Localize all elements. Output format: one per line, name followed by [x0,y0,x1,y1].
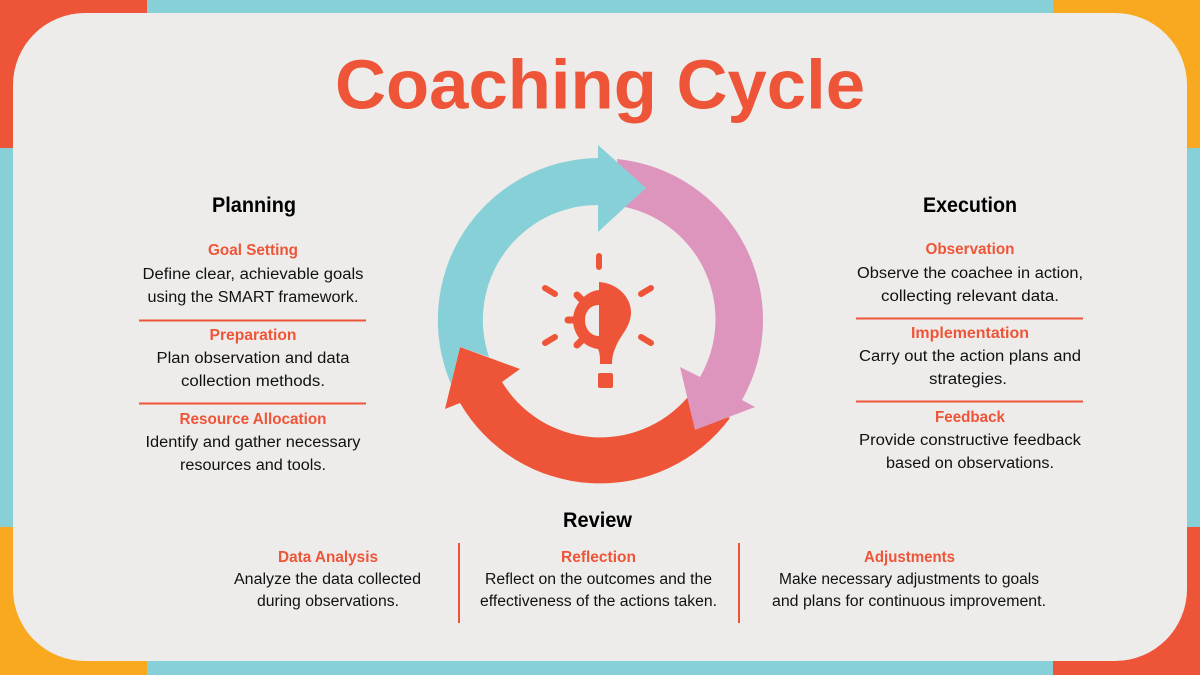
text block: goal setting: Define clear, achievable goals [142,266,364,283]
text block: resource allocation: Resource Allocation [180,411,326,428]
text block: implementation: Carry out the action plans and [859,348,1081,365]
text block: implementation [859,325,1081,388]
text block: adjustments: Adjustments [864,549,955,566]
heading: execution: Execution [923,194,1017,217]
text block: adjustments: Make necessary adjustments to goals [779,571,1039,588]
heading: review: Review [563,509,633,532]
text block: reflection: Reflect on the outcomes and the [485,571,712,588]
text block: data analysis: Data Analysis [278,549,378,566]
text block: implementation: strategies. [929,371,1007,388]
text block: reflection: Reflection [561,549,636,566]
text block: observation: collecting relevant data. [881,288,1059,305]
text block: resource allocation [146,411,361,474]
panel: review [234,509,1046,623]
text block: observation: Observation [926,241,1014,258]
text block: goal setting [142,242,364,306]
text block: preparation [156,327,350,390]
text block: reflection [480,549,717,610]
text block: observation [857,241,1083,305]
text block: adjustments: and plans for continuous improvement. [772,593,1046,610]
arrow: planning (teal) [438,145,646,384]
text block: preparation: collection methods. [181,373,325,390]
text block: resource allocation: resources and tools. [180,457,326,474]
icon: light bulb with gear [545,256,651,388]
text block: adjustments [772,549,1046,610]
text block: data analysis: Analyze the data collected [234,571,421,588]
text block: observation: Observe the coachee in action, [857,265,1083,282]
panel: planning [139,194,366,474]
text block: feedback: Feedback [935,409,1005,426]
heading: planning: Planning [212,194,296,217]
text block: implementation: Implementation [911,325,1029,342]
text block: preparation: Plan observation and data [156,350,350,367]
arrow: review (red) [445,347,730,483]
text block: reflection: effectiveness of the actions taken. [480,593,717,610]
text block: preparation: Preparation [210,327,296,344]
arrow: execution (pink) [617,159,763,430]
panel: execution [856,194,1083,472]
text block: goal setting: using the SMART framework. [148,289,358,306]
title: Coaching Cycle [335,46,865,124]
text block: feedback: Provide constructive feedback [859,432,1081,449]
text block: feedback [859,409,1081,472]
text block: feedback: based on observations. [886,455,1054,472]
text block: data analysis [234,549,421,610]
cycle diagram [438,145,763,483]
text block: resource allocation: Identify and gather necessary [146,434,361,451]
text block: data analysis: during observations. [257,593,399,610]
text block: goal setting: Goal Setting [208,242,298,259]
